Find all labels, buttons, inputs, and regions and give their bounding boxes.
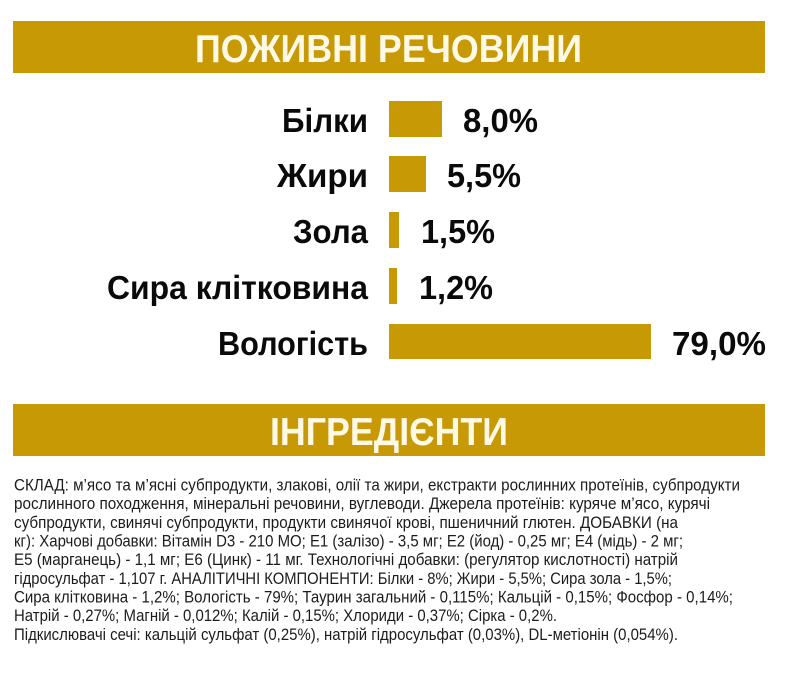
text block: composition: кг): Харчові добавки: Вітамін D3 - 210 МО; Е1 (залізо) - 3,5 мг; Е2 (йод) - 0,25 мг; Е4 (мідь) - 2 мг; [14, 532, 683, 550]
bar row: fat: Жири [276, 157, 368, 194]
bar row: ash: Зола [293, 213, 369, 250]
bar row: crude fibre: Сира клітковина [107, 269, 369, 306]
heading: ingredients: ІНГРЕДІЄНТИ [270, 411, 508, 454]
text block: composition: СКЛАД: м’ясо та м’ясні субпродукти, злакові, олії та жири, екстракти рослинних протеїнів, субпродукти [14, 476, 740, 494]
bar row: moisture: 79,0% [672, 325, 766, 362]
bar row: crude fibre [107, 268, 493, 306]
text block: composition: Підкислювачі сечі: кальцій сульфат (0,25%), натрій гідросульфат (0,03%), DL-метіонін (0,054%). [14, 626, 678, 644]
bar row: protein: Білки [282, 102, 368, 139]
text block: composition: Натрій - 0,27%; Магній - 0,012%; Калій - 0,15%; Хлориди - 0,37%; Сірка - 0,2%. [14, 607, 557, 625]
heading: nutrients [13, 21, 765, 73]
bar row: ash: 1,5% [421, 213, 495, 250]
bar row: ash [293, 212, 495, 250]
bar row: protein: 8,0% [463, 102, 538, 139]
bar row: fat [276, 156, 521, 194]
text block: composition: рослинного походження, мінеральні речовини, вуглеводи. Джерела протеїнів: куряче м’ясо, курячі [14, 495, 710, 513]
panel: ingredients [13, 404, 765, 644]
text block: composition: субпродукти, свинячі субпродукти, продукти свинячої крові, пшеничний глютен. ДОБАВКИ (на [14, 514, 679, 532]
heading: ingredients [13, 404, 765, 456]
bar row: protein [282, 101, 538, 139]
text block: composition: Е5 (марганець) - 1,1 мг; Е6 (Цинк) - 11 мг. Технологічні добавки: (регулятор кислотності) натрій [14, 551, 678, 569]
bar row: crude fibre: 1,2% [419, 269, 493, 306]
bar row: fat: 5,5% [447, 157, 521, 194]
bar row: moisture: Вологість [218, 325, 368, 362]
panel: nutrients [13, 21, 766, 362]
heading: nutrients: ПОЖИВНІ РЕЧОВИНИ [195, 28, 582, 71]
text block: composition: Сира клітковина - 1,2%; Вологість - 79%; Таурин загальний - 0,115%; Кальцій - 0,15%; Фосфор - 0,14%; [14, 588, 733, 606]
text block: composition [14, 476, 740, 644]
bar row: moisture [218, 324, 766, 362]
text block: composition: гідросульфат - 1,107 г. АНАЛІТИЧНІ КОМПОНЕНТИ: Білки - 8%; Жири - 5,5%; Сира зола - 1,5%; [14, 570, 672, 588]
